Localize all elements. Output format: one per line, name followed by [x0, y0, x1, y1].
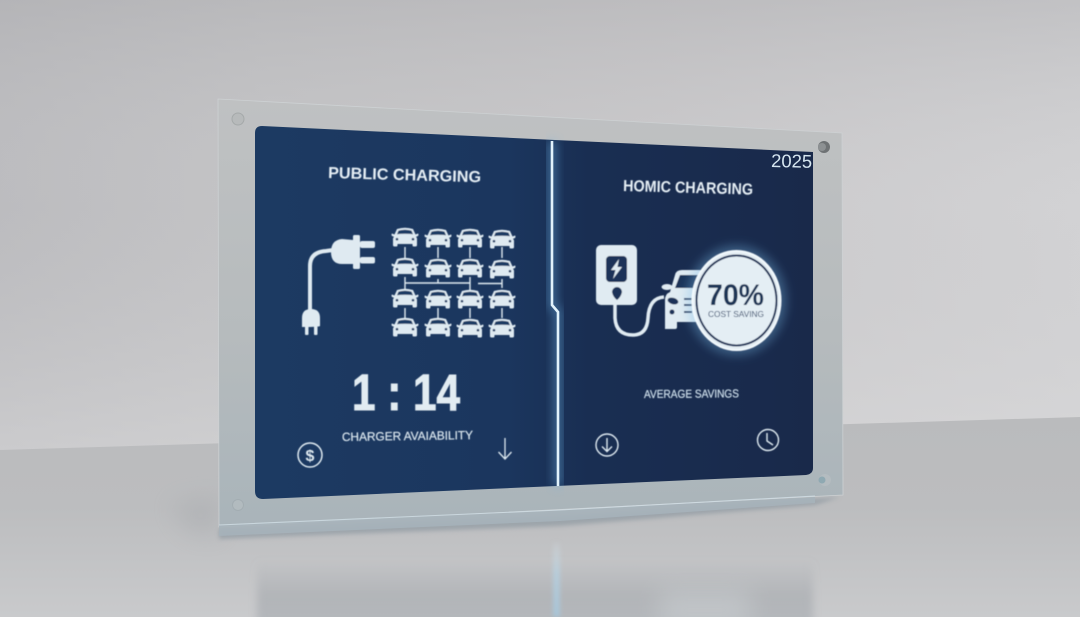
icon: wall charger with cable	[596, 245, 664, 335]
standoff screw: top right	[818, 141, 830, 153]
heading: public charging: PUBLIC CHARGING	[328, 165, 481, 186]
label: cost saving: COST SAVING	[708, 309, 764, 319]
left panel: public charging	[298, 165, 516, 467]
icon: car front	[662, 270, 710, 329]
year label: 2025	[771, 150, 812, 172]
icon: clock	[758, 430, 778, 450]
caption: charger availability: CHARGER AVAIABILITY	[342, 428, 473, 444]
navy screen	[255, 126, 813, 499]
heading: home charging: HOMIC CHARGING	[623, 178, 753, 199]
glass panel	[218, 99, 843, 536]
floor reflection of panel	[257, 543, 813, 617]
floor surface	[0, 417, 1080, 617]
standoff screw: bottom left	[232, 500, 244, 510]
glowing divider	[552, 141, 558, 486]
icon: dollar circle	[298, 443, 322, 467]
icon: power plug	[302, 235, 375, 335]
icon: down arrow	[498, 438, 512, 459]
background wall	[0, 0, 1080, 460]
chart: grid of cars linked to one charger	[392, 228, 516, 338]
ratio value: 1 : 14	[352, 364, 461, 421]
standoff screw: top left	[232, 113, 244, 125]
caption: average savings: AVERAGE SAVINGS	[644, 388, 739, 401]
right panel: home charging	[596, 178, 786, 456]
standoff screw: bottom right	[818, 474, 831, 486]
icon: download circle	[596, 434, 618, 456]
value: 70%: 70%	[707, 279, 764, 312]
panel shadow on floor	[170, 495, 840, 539]
icon: dollar circle: $	[306, 448, 315, 465]
callout: 70% cost saving badge	[686, 246, 786, 356]
